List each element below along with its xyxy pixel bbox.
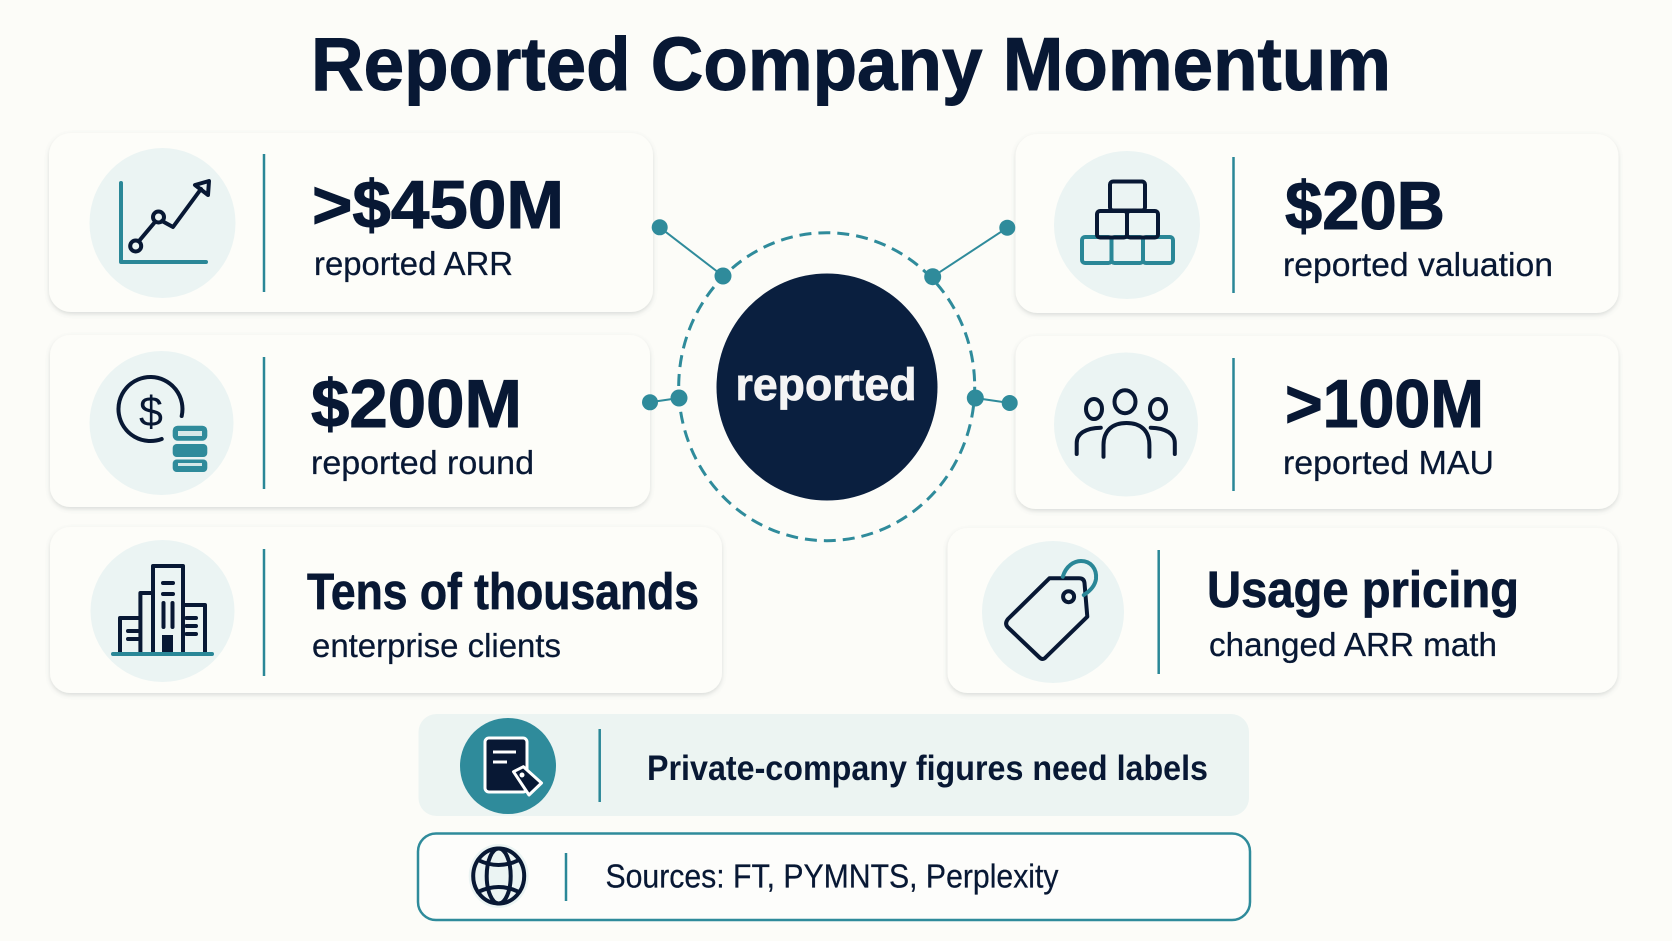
value: >$450M: >$450M: [312, 167, 564, 243]
icon: growth chart: [90, 148, 236, 298]
panel: reported MAU: [1016, 336, 1618, 509]
sources text: Sources: FT, PYMNTS, Perplexity: [606, 858, 1059, 895]
label: enterprise clients: enterprise clients: [312, 627, 561, 664]
callout: private-company figures: [418, 714, 1249, 816]
panel: reported valuation: [1016, 134, 1618, 313]
dashed ring: [679, 233, 975, 541]
icon: people group: [1054, 352, 1198, 496]
label: reported valuation: reported valuation: [1283, 246, 1553, 283]
value: >100M: >100M: [1285, 366, 1484, 442]
value: Tens of thousands: Tens of thousands: [307, 563, 699, 620]
icon: globe: [469, 844, 529, 908]
central hub: [642, 219, 1018, 541]
label: reported round: reported round: [311, 444, 534, 481]
connector: top right: [924, 220, 1015, 285]
hub circle: [716, 274, 938, 500]
connector: top left: [652, 219, 732, 284]
label: changed ARR math: changed ARR math: [1209, 626, 1497, 663]
value: $20B: $20B: [1285, 168, 1445, 244]
panel: usage pricing: [948, 528, 1618, 693]
icon: dollar and coins: [90, 351, 234, 495]
connector: middle left: [642, 390, 688, 410]
panel: sources: [418, 834, 1250, 920]
hub label: reported: [736, 359, 916, 410]
label: reported ARR: reported ARR: [314, 245, 513, 282]
connector: middle right: [967, 390, 1018, 411]
panel: reported ARR: [49, 133, 653, 312]
icon: dollar and coins: $: [139, 388, 163, 436]
icon: stacked blocks: [1054, 151, 1200, 299]
panel: enterprise clients: [50, 527, 722, 693]
value: $200M: $200M: [311, 366, 522, 442]
icon: document with tag: [460, 718, 556, 814]
callout text: Private-company figures need labels: [647, 749, 1208, 788]
icon: price tag: [982, 541, 1124, 683]
title: Reported Company Momentum: [311, 22, 1391, 106]
label: reported MAU: reported MAU: [1283, 444, 1494, 481]
icon: office buildings: [90, 540, 234, 682]
panel: reported round: [50, 335, 650, 507]
value: Usage pricing: Usage pricing: [1207, 561, 1519, 618]
